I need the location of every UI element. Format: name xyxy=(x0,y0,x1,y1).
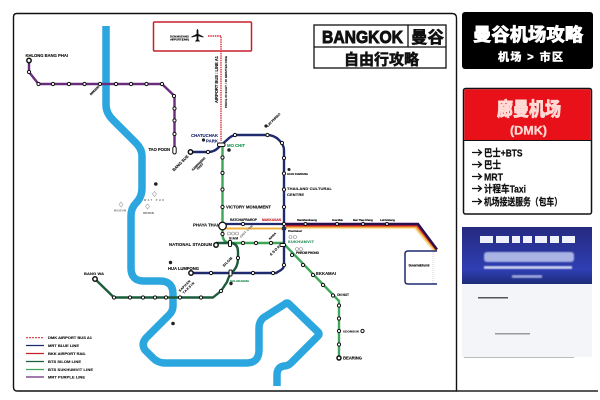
subtitle: 自由行攻略 xyxy=(344,50,419,68)
station labels: SAPHAN xyxy=(178,279,192,293)
route list: MRT xyxy=(484,172,503,184)
station labels: Ramkhamhaeng xyxy=(297,218,317,222)
station labels: BANG SUE xyxy=(171,154,190,172)
station labels: BANG WA xyxy=(84,271,104,276)
legend: DMK AIRPORT BUS A1 xyxy=(48,335,93,340)
station labels: PHAYA THAI xyxy=(193,222,218,228)
airport rail end box xyxy=(405,251,437,284)
station labels: SILOM xyxy=(222,256,233,268)
station labels: LAT PHRAO xyxy=(266,112,282,128)
route list: 巴士 xyxy=(484,158,501,172)
airport bus dotted line xyxy=(208,36,221,141)
station labels: VICTORY MONUMENT xyxy=(226,204,271,210)
interchange stations xyxy=(218,143,286,276)
station labels: Lat Krabang xyxy=(380,218,395,222)
navy MRT blue line xyxy=(188,133,286,275)
route list: 巴士+BTS xyxy=(484,146,523,160)
station labels: SALADAENG xyxy=(230,279,250,283)
station labels: ON NUT xyxy=(337,293,349,297)
attraction markers xyxy=(114,124,302,325)
subheading: airport to city: 机场 > 市区 xyxy=(498,50,563,64)
station labels: RATCHAPRAROP xyxy=(230,218,258,222)
card title: 廊曼机场 xyxy=(497,98,561,120)
station labels: UDOMSUK xyxy=(343,330,360,334)
station labels: CHATUCHAK xyxy=(191,133,219,138)
station labels xyxy=(26,53,395,360)
panel: DMK airport card xyxy=(464,88,592,214)
route list: 机场接送服务（包车） xyxy=(484,196,562,208)
airport name second line: AIRPORT (DMK) xyxy=(170,38,189,42)
station labels: NANA xyxy=(268,231,278,241)
station labels: EKKAMAI xyxy=(316,271,336,276)
station labels: MO CHIT xyxy=(227,143,245,148)
airport rail link stripes xyxy=(222,222,437,251)
station labels: HUAI KHWANG xyxy=(287,172,309,176)
green Sukhumvit line xyxy=(221,146,364,360)
legend xyxy=(26,335,93,380)
title box xyxy=(314,25,446,68)
station labels: MAKKASAN xyxy=(262,218,282,222)
attraction markers: WAT ARUN xyxy=(143,212,154,215)
legend: BTS SUKHUMVIT LINE xyxy=(48,367,93,372)
card subtitle: (DMK) xyxy=(510,124,547,138)
attraction markers: MUSEUM xyxy=(114,210,126,212)
station labels: ASOK xyxy=(269,244,281,257)
red airport box xyxy=(154,22,252,51)
station labels: HUA LUMPONG xyxy=(168,266,199,271)
airport rail end box: Suvarnabhumi xyxy=(408,264,430,268)
route list: 计程车Taxi xyxy=(484,182,526,196)
station labels: SIAM xyxy=(229,236,238,240)
station labels: Phetchaburi xyxy=(288,229,302,233)
map frame xyxy=(14,14,456,391)
station labels: Ban Thap Chang xyxy=(353,218,373,222)
station labels: TAKSIN xyxy=(182,281,196,295)
route list xyxy=(472,146,562,208)
panel: blurred photo card xyxy=(462,227,592,358)
title: Chinese city: 曼谷 xyxy=(411,28,444,47)
purple line xyxy=(27,58,176,154)
station labels: PHROM PHONG xyxy=(296,251,320,255)
airport bus vertical label: AIRPORT BUS : LINE A1 xyxy=(214,55,219,103)
legend: MRT PURPLE LINE xyxy=(48,374,85,380)
station labels: KAMPHAENG xyxy=(191,156,207,172)
station labels: BEARING xyxy=(343,356,362,360)
station labels: BANG SON xyxy=(89,85,100,96)
panel: airport guide heading xyxy=(462,12,593,69)
station labels: PARK xyxy=(206,138,219,144)
station labels: SUKHUMVIT xyxy=(288,240,315,244)
station labels: PHET xyxy=(196,162,204,171)
legend: BTS SILOM LINE xyxy=(48,359,81,364)
station labels: CENTRE xyxy=(287,192,304,197)
icon: plane xyxy=(192,29,204,42)
station labels: TAO POON xyxy=(148,147,170,152)
airport name: DON MUEANG xyxy=(170,34,190,38)
river xyxy=(106,26,319,386)
station labels: NATIONAL STADIUM xyxy=(169,242,212,247)
dark green Silom line xyxy=(93,243,240,299)
station labels: KHLONG BANG PHAI xyxy=(26,53,68,58)
station labels: CHIT LOM xyxy=(239,224,254,239)
station labels: Hua Mak xyxy=(332,218,343,222)
legend: MRT BLUE LINE xyxy=(48,343,79,348)
attraction markers: WAT PHO xyxy=(144,199,164,202)
station labels: THAILAND CULTURAL xyxy=(287,186,333,191)
title: Bangkok: BANGKOK xyxy=(322,27,403,47)
airport bus price label: PRICE 30 BAHT / 30 MINUTES RIDE xyxy=(224,56,228,108)
heading text: 曼谷机场攻略 xyxy=(473,24,584,45)
bottom rule xyxy=(456,390,598,392)
legend: BKK AIRPORT RAIL xyxy=(48,351,87,356)
